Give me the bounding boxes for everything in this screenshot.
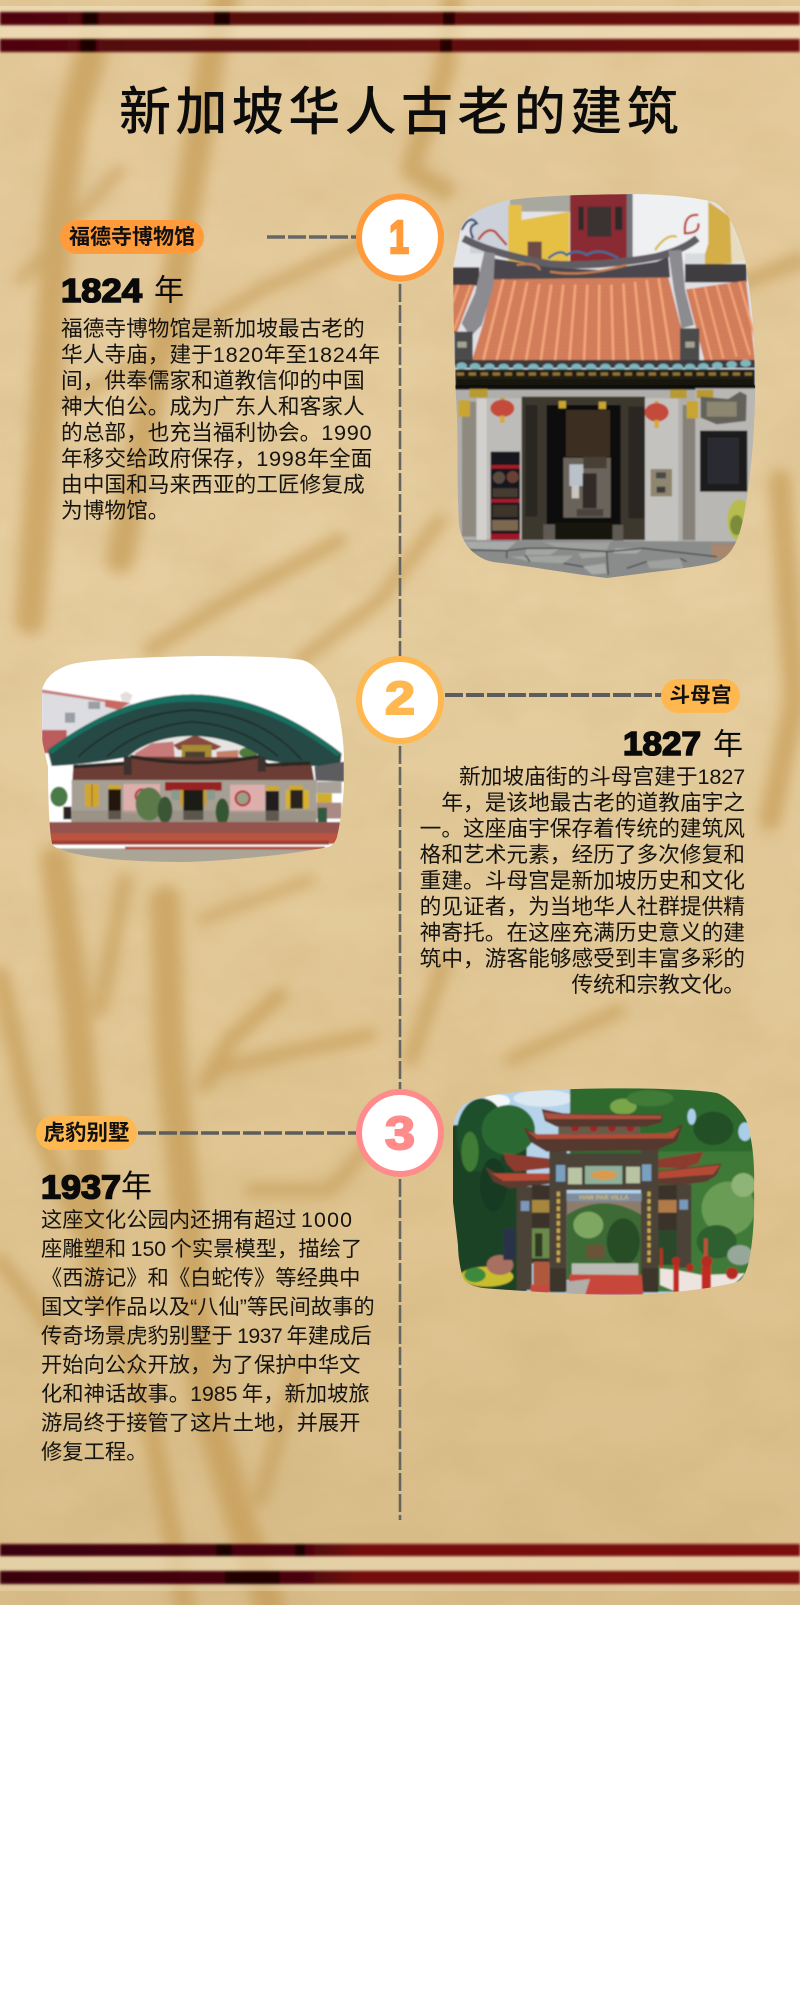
number badge 2 <box>359 659 441 741</box>
body text: 虎豹别墅: 国文学作品以及“八仙”等民间故事的 <box>41 1295 375 1319</box>
upper roofs <box>523 1109 683 1152</box>
number badge 3 <box>359 1092 441 1174</box>
red forecourt <box>50 820 340 862</box>
lanterns and gold brackets <box>458 389 713 428</box>
body text: 虎豹别墅: 化和神话故事。1985 年，新加坡旅 <box>41 1382 370 1406</box>
body text: 虎豹别墅: 《西游记》和《白蛇传》等经典中 <box>41 1266 360 1290</box>
label pill: 福德寺博物馆 <box>60 220 204 254</box>
year heading: 1937: 年 <box>121 1161 152 1206</box>
body text: 福德寺博物馆: 由中国和马来西亚的工匠修复成 <box>61 472 365 497</box>
photo: Thian Hock Keng style temple facade <box>450 190 760 585</box>
connector: museum pill to circle 1 <box>267 235 356 239</box>
number badge 2: 2 <box>385 672 415 724</box>
year heading: 1827 <box>623 720 743 764</box>
year heading: 1824: 1824 <box>61 272 143 309</box>
window, intercom, plaque and plant <box>651 392 751 541</box>
body text: 斗母宫: 新加坡庙街的斗母宫建于1827 <box>459 764 745 789</box>
sky and neighbouring buildings <box>470 194 744 266</box>
red and white balustrade <box>660 1238 745 1293</box>
connector: circle 2 to Dou Mu Gong pill <box>445 693 662 697</box>
body text: 虎豹别墅: 这座文化公园内还拥有超过 1000 <box>41 1208 353 1232</box>
connector: Haw Par Villa pill to circle 3 <box>138 1131 356 1135</box>
label pill: 斗母宫: 斗母宫 <box>669 684 732 707</box>
year heading: 1827: 1827 <box>623 725 701 762</box>
main orange tiled roof <box>472 276 682 362</box>
body text: 福德寺博物馆 <box>61 316 380 523</box>
body text: 福德寺博物馆: 的总部，也充当福利协会。1990 <box>61 420 372 445</box>
number badge 1: 1 <box>389 211 409 263</box>
grey bargeboards and end ornaments <box>454 250 699 365</box>
body text: 斗母宫: 筑中，游客能够感受到丰富多彩的 <box>420 946 745 971</box>
poster board <box>491 452 520 540</box>
year heading: 1824 <box>61 266 184 310</box>
year heading: 1937 <box>41 1161 152 1206</box>
temple walls, doors and windows <box>71 780 317 823</box>
label pill: 福德寺博物馆: 福德寺博物馆 <box>69 226 195 249</box>
body text: 福德寺博物馆: 福德寺博物馆是新加坡最古老的 <box>61 316 365 341</box>
label pill: 虎豹别墅: 虎豹别墅 <box>43 1121 130 1145</box>
central gate <box>549 1145 658 1292</box>
stone pavement <box>464 539 736 578</box>
body text: 虎豹别墅: 座雕塑和 150 个实景模型，描绘了 <box>41 1237 362 1261</box>
body text: 斗母宫: 的见证者，为当地华人社群提供精 <box>420 894 745 919</box>
ridge with dragon ornaments <box>462 215 698 282</box>
body text: 斗母宫: 神寄托。在这座充满历史意义的建 <box>420 920 745 945</box>
left building <box>42 689 135 753</box>
door frame and entry <box>522 397 645 541</box>
label pill: 虎豹别墅 <box>36 1116 137 1150</box>
side roofs <box>453 264 755 363</box>
body text: 斗母宫: 一。这座庙宇保存着传统的建筑风 <box>420 816 745 841</box>
trees and surroundings <box>50 762 344 825</box>
body text: 虎豹别墅 <box>41 1208 375 1464</box>
body text: 虎豹别墅: 修复工程。 <box>41 1440 148 1464</box>
title: 新加坡华人古老的建筑 <box>119 84 683 142</box>
body text: 斗母宫: 格和艺术元素，经历了多次修复和 <box>420 842 745 867</box>
green canopy <box>48 694 342 767</box>
year heading: 1937: 1937 <box>41 1168 121 1206</box>
body text: 斗母宫 <box>420 764 745 997</box>
number badge 1 <box>359 196 441 278</box>
number badge 3: 3 <box>385 1107 415 1159</box>
body text: 斗母宫: 年，是该地最古老的道教庙宇之 <box>441 790 745 815</box>
body text: 虎豹别墅: 传奇场景虎豹别墅于 1937 年建成后 <box>41 1324 372 1348</box>
label pill: 斗母宫 <box>661 679 740 712</box>
top decorative stripes <box>0 6 800 52</box>
body text: 虎豹别墅: 开始向公众开放，为了保护中华文 <box>41 1353 360 1377</box>
body text: 斗母宫: 重建。斗母宫是新加坡历史和文化 <box>420 868 745 893</box>
arch interior <box>567 1200 643 1280</box>
body text: 斗母宫: 传统和宗教文化。 <box>571 972 745 997</box>
view through canopy arch <box>132 735 258 762</box>
photo: Haw Par Villa gate <box>450 1085 760 1300</box>
ground and statues <box>460 1228 643 1295</box>
bottom decorative stripes <box>0 1544 800 1591</box>
body text: 福德寺博物馆: 间，供奉儒家和道教信仰的中国 <box>61 368 365 393</box>
central gate: HAW PAR VILLA <box>579 1194 629 1201</box>
body text: 福德寺博物馆: 神大伯公。成为广东人和客家人 <box>61 394 365 419</box>
temple roof <box>72 757 314 781</box>
eaves, frieze and beam <box>455 360 755 390</box>
photo: Dou Mu Gong temple under green canopy <box>42 656 344 862</box>
body text: 福德寺博物馆: 华人寺庙，建于1820年至1824年 <box>61 342 380 367</box>
year heading: 1824: 年 <box>154 266 184 310</box>
year heading: 1827: 年 <box>713 720 743 764</box>
sky and trees <box>450 1085 760 1292</box>
side wings with roofs, pillars and panels <box>485 1152 722 1290</box>
body text: 福德寺博物馆: 年移交给政府保存，1998年全面 <box>61 446 372 471</box>
body text: 虎豹别墅: 游局终于接管了这片土地，并展开 <box>41 1411 360 1435</box>
body text: 福德寺博物馆: 为博物馆。 <box>61 498 169 523</box>
walls and columns <box>450 385 760 545</box>
timeline: vertical dashed line <box>399 284 401 1520</box>
